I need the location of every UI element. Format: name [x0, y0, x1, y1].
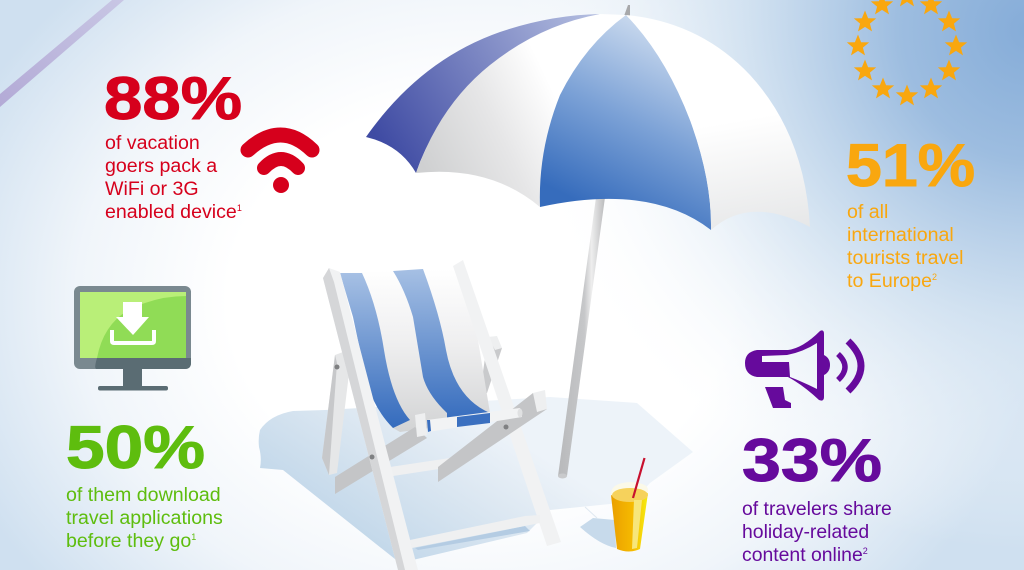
umbrella pole	[558, 190, 606, 476]
cup body	[611, 493, 648, 552]
stat description: 2	[932, 272, 937, 282]
icon: monitor download	[74, 286, 191, 390]
pins	[334, 364, 508, 460]
mid bar	[390, 458, 453, 476]
stat description: international	[847, 224, 954, 246]
stat description: WiFi or 3G	[105, 178, 199, 200]
stat: 50% applications	[66, 414, 228, 552]
juice surface	[612, 488, 648, 502]
stat description: tourists travel	[847, 247, 964, 269]
stat figure: 88%	[104, 65, 242, 132]
icon: EU stars	[847, 0, 967, 105]
rear leg	[322, 352, 350, 475]
lower bar	[410, 515, 540, 550]
diagonal ribbon	[0, 0, 124, 107]
stat description: 2	[863, 546, 868, 556]
stat description: to Europe	[847, 270, 937, 292]
megaphone handle	[765, 387, 791, 408]
stat figure: 50%	[66, 414, 205, 481]
seat rail right	[438, 390, 547, 482]
straw	[633, 458, 644, 498]
stat description: 1	[191, 532, 196, 542]
stat description: holiday-related	[742, 521, 869, 543]
rail left	[323, 268, 418, 570]
umbrella	[366, 5, 810, 478]
canvas	[340, 269, 490, 432]
rail right	[453, 260, 561, 546]
seat block left	[415, 413, 427, 437]
stat: 33% share	[742, 427, 897, 566]
deck chair	[322, 260, 561, 570]
stat description: travel applications	[66, 507, 223, 529]
canopy blue panel	[540, 15, 711, 230]
stat description: of vacation	[105, 132, 200, 154]
stat description: goers pack a	[105, 155, 217, 177]
umbrella tip	[624, 5, 630, 16]
canopy dark panel	[366, 14, 600, 173]
stat description: enabled device	[105, 201, 242, 223]
stat description: of travelers share	[742, 498, 892, 520]
icon: wifi	[248, 135, 312, 193]
megaphone body	[745, 330, 830, 401]
stat description: content online	[742, 544, 868, 566]
cup rim	[611, 482, 648, 498]
stat: 51% Europe	[846, 132, 975, 292]
blue stripe left	[340, 273, 410, 428]
stat description: 1	[237, 203, 242, 213]
stat figure: 33%	[742, 427, 882, 494]
sound waves	[838, 341, 861, 391]
cup of juice	[611, 458, 648, 552]
seat rail left	[335, 427, 427, 494]
right rear support	[480, 336, 502, 393]
canopy white panel	[626, 15, 810, 230]
stat figure: 51%	[846, 132, 975, 199]
icon: megaphone	[745, 330, 861, 408]
beach shadow on sand	[259, 397, 693, 563]
canopy grey panel	[416, 14, 626, 207]
stat: 88% WiFi	[104, 65, 242, 223]
highlight	[632, 500, 642, 549]
blue stripe right	[393, 269, 490, 424]
stat description: before they go	[66, 530, 196, 552]
stat description: of them download	[66, 484, 221, 506]
stat description: of all	[847, 201, 888, 223]
roller	[427, 408, 522, 432]
